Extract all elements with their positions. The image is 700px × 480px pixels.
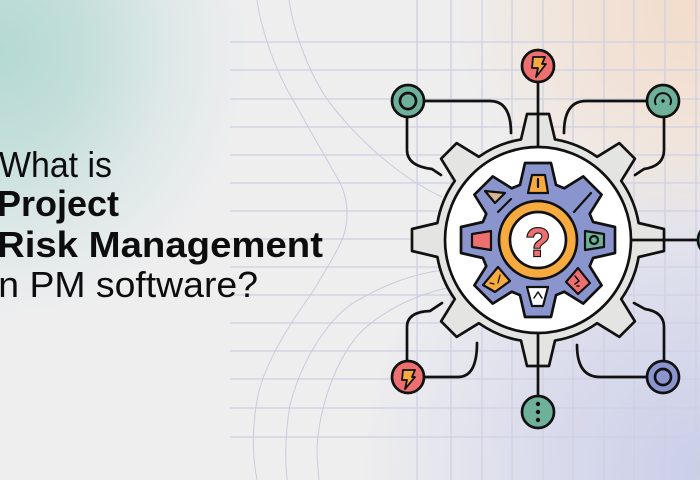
outer gear: [412, 114, 664, 366]
icon: orange trapezoid: [528, 175, 548, 193]
node: right edge green: [698, 224, 700, 256]
title: [0, 144, 323, 305]
icon: white trapezoid with caret: [527, 287, 548, 306]
title line: Project: Project: [0, 183, 119, 224]
nodes: [392, 50, 700, 428]
icon: red trapezoid: [472, 231, 491, 250]
node: right green arc: [647, 85, 679, 117]
node: left green ring: [392, 85, 424, 117]
question mark: ?: [526, 221, 550, 265]
icon: orange wedge: [483, 267, 510, 292]
connector lines: [407, 101, 664, 377]
node: lower left red bolt: [392, 361, 424, 393]
icon: tan triangle: [485, 191, 505, 203]
white disc: [445, 147, 631, 333]
node: top red bolt: [522, 50, 554, 82]
icon: red diamond: [566, 268, 590, 294]
node: lower right blue ring: [647, 361, 679, 393]
title line: What is: What is: [0, 144, 112, 185]
orange hub ring: [499, 201, 577, 279]
icon: diagonal marks: [498, 193, 591, 212]
gear icons: [472, 175, 604, 306]
icon: green square with circle: [585, 231, 604, 250]
spokes to top, right and bottom nodes: [538, 82, 698, 396]
node: bottom green dots: [522, 396, 554, 428]
title line: Risk Management: Risk Management: [0, 224, 323, 265]
inner blue gear: [461, 163, 615, 317]
